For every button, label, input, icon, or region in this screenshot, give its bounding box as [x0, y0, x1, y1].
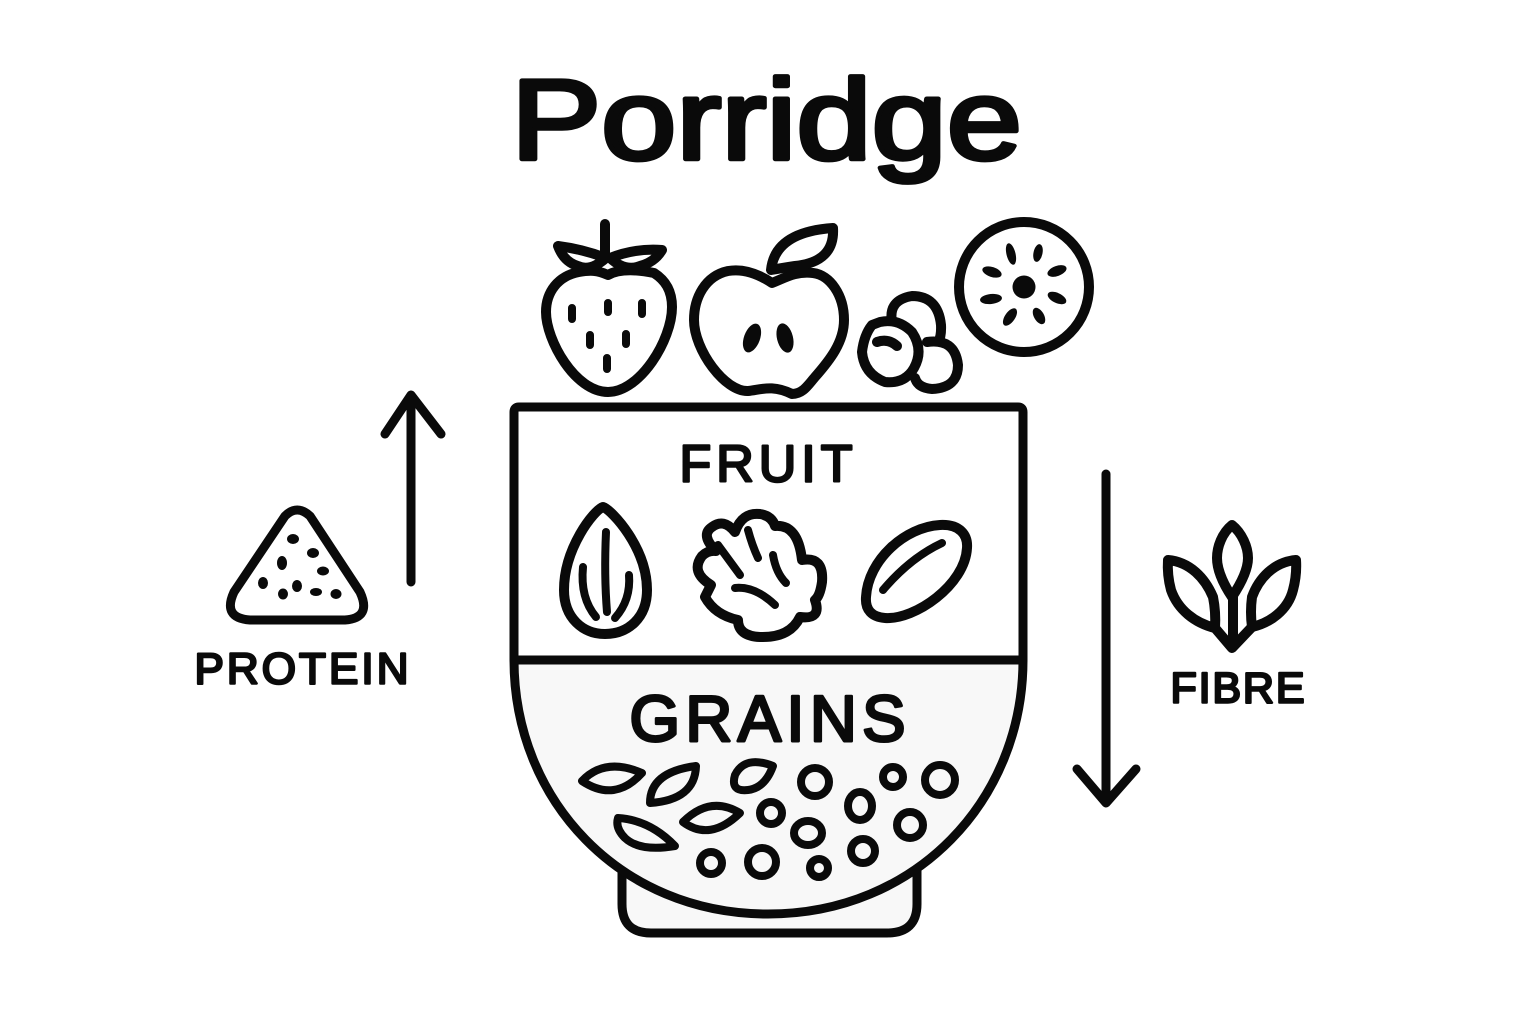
bowl	[514, 407, 1023, 933]
fibre group	[1168, 525, 1304, 712]
bowl foot	[622, 868, 917, 933]
protein group	[194, 510, 408, 694]
kiwi seeds	[980, 242, 1068, 328]
icon: fibre leaves	[1168, 525, 1296, 648]
round grains	[801, 768, 829, 796]
icon: apple	[694, 228, 844, 394]
grains section background	[514, 660, 1023, 914]
oat flakes	[582, 767, 642, 790]
icon: seed	[866, 525, 967, 618]
fruit label: FRUIT	[680, 436, 852, 494]
protein label: PROTEIN	[194, 644, 408, 694]
grains label: GRAINS	[630, 682, 906, 755]
icon: protein wedge	[230, 510, 364, 620]
arrow: up	[385, 395, 441, 582]
icon: almond	[564, 507, 647, 634]
grain pieces	[582, 762, 955, 877]
icon: kiwi slice	[959, 222, 1089, 352]
icon: strawberry	[546, 224, 672, 392]
icon: berries	[862, 296, 958, 389]
fruit section	[514, 407, 1023, 660]
fibre label: FIBRE	[1170, 664, 1304, 712]
title: Porridge	[511, 57, 1022, 184]
icon: walnut	[698, 514, 822, 637]
arrow: down	[1077, 474, 1136, 803]
seeds	[572, 303, 642, 369]
